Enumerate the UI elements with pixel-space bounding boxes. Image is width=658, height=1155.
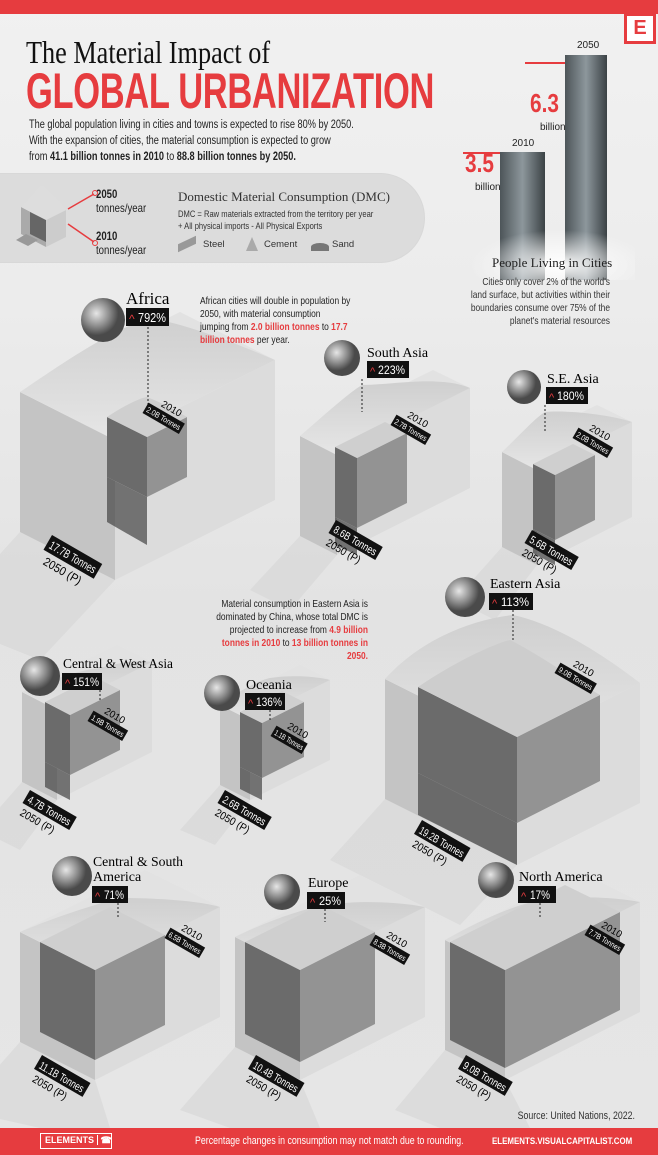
label: Eastern Asia 2050 <box>406 820 470 875</box>
label: North America title and percent <box>518 870 603 903</box>
label: North America 2050: 9.0B Tonnes <box>461 1060 508 1095</box>
icon: North America globe <box>478 862 514 898</box>
footer logo <box>40 1133 112 1149</box>
legend 2050 / 2010 <box>96 187 146 215</box>
label: S.E. Asia title and percent: ^ <box>549 392 555 404</box>
label: North America title and percent: 17% <box>530 888 550 902</box>
region: Central & South America <box>0 855 220 1128</box>
intro paragraph: from 41.1 billion tonnes in 2010 to 88.8 billion tonnes by 2050. <box>29 151 296 163</box>
label: Central & South America 2050: 11.1B Tonnes <box>37 1060 86 1096</box>
DMC heading and definition: Domestic Material Consumption (DMC) <box>178 189 390 204</box>
legend 2050 / 2010: 2050 <box>96 187 117 201</box>
label: Europe title and percent <box>307 876 348 909</box>
label: South Asia 2050: 2050 (P) <box>324 537 363 566</box>
icon: Central & South America globe <box>52 856 92 896</box>
label: South Asia 2050: 8.6B Tonnes <box>331 524 379 559</box>
label: South Asia title and percent: South Asia <box>367 346 429 361</box>
label: Oceania title and percent <box>245 678 293 710</box>
icon: Europe globe <box>264 874 300 910</box>
label: Central & South America title and percent: 71% <box>104 888 124 902</box>
region: North America <box>395 862 640 1128</box>
label: S.E. Asia 2010 <box>572 418 619 458</box>
label: Africa 2050: 17.7B Tonnes <box>47 538 99 576</box>
label: South Asia 2010 <box>390 405 437 445</box>
label: Oceania title and percent: ^ <box>248 698 254 710</box>
label: Central & South America title and percent: Central & South <box>93 855 183 870</box>
icon: legend cube <box>16 207 66 247</box>
label: North America 2010 <box>584 915 631 955</box>
label: Oceania 2050: 2050 (P) <box>213 807 252 836</box>
label: Central & South America 2050 <box>26 1055 90 1110</box>
label: Europe 2050 <box>240 1055 304 1110</box>
label: North America 2010: 7.7B Tonnes <box>587 927 622 953</box>
label: Eastern Asia 2010 <box>554 653 602 694</box>
label: S.E. Asia 2010: 2.0B Tonnes <box>575 430 610 456</box>
label: Africa 2010 <box>142 393 190 434</box>
label: S.E. Asia title and percent: 180% <box>557 389 584 403</box>
chart: skyscrapers people living in cities: billion <box>475 182 501 193</box>
intro paragraph: With the expansion of cities, the material consumption is expected to grow <box>29 135 331 147</box>
label: Europe 2010: 2010 <box>384 930 409 951</box>
label: S.E. Asia 2050 <box>517 530 579 583</box>
label: South Asia title and percent <box>367 346 429 378</box>
chart: skyscrapers people living in cities: 6.3 <box>530 88 559 118</box>
label: South Asia 2010: 2010 <box>405 410 430 431</box>
title: The Material Impact of <box>26 34 270 70</box>
chart: skyscrapers people living in cities: billion <box>540 122 566 133</box>
footer logo: ELEMENTS ☎ <box>45 1135 112 1145</box>
label: Oceania 2050: 2.6B Tonnes <box>220 794 268 829</box>
label: South Asia 2010: 2.7B Tonnes <box>393 417 428 443</box>
source: Source: United Nations, 2022. <box>518 1110 635 1122</box>
label: Europe 2050: 2050 (P) <box>244 1073 283 1103</box>
legend items steel cement sand <box>178 236 354 252</box>
label: Central & South America title and percent: ^ <box>95 891 101 903</box>
label: Oceania 2010: 1.1B Tonnes <box>273 728 305 752</box>
label: Central & South America 2010 <box>164 918 211 958</box>
label: Europe title and percent: ^ <box>310 897 316 909</box>
panel: DMC legend: + All physical imports - All Physical Exports <box>178 221 322 232</box>
label: North America 2010: 2010 <box>599 920 624 941</box>
intro paragraph: The global population living in cities and towns is expected to rise 80% by 2050. <box>29 119 354 131</box>
label: Central & South America 2010: 2010 <box>179 923 204 944</box>
label: Central & South America title and percent <box>92 855 183 903</box>
text: Africa note: African cities will double in population by 2050, with material consumption jumping from 2.0 billion tonnes to 17.7 billion tonnes per year. <box>200 295 350 346</box>
chart: skyscrapers people living in cities <box>463 40 609 280</box>
label: S.E. Asia title and percent <box>546 372 600 404</box>
label: South Asia 2050 <box>321 520 383 573</box>
heading: people living in cities: People Living in Cities <box>492 255 612 270</box>
icon: Eastern Asia globe <box>445 577 485 617</box>
label: Eastern Asia title and percent: Eastern Asia <box>490 577 561 592</box>
label: Africa 2010: 2.0B Tonnes <box>145 405 182 432</box>
label: Central & South America title and percent: America <box>93 870 142 885</box>
panel: DMC legend: 2010 <box>96 229 117 243</box>
label: Oceania title and percent: 136% <box>256 695 282 709</box>
label: Africa 2050: 2050 (P) <box>41 554 84 588</box>
top red bar <box>0 0 658 14</box>
region: South Asia <box>250 340 470 610</box>
label: Europe 2010 <box>370 925 416 965</box>
icon: South Asia globe <box>324 340 360 376</box>
panel: DMC legend: tonnes/year <box>96 243 146 257</box>
label: North America title and percent: North America <box>519 870 603 885</box>
legend items steel cement sand: Steel <box>203 239 225 250</box>
label: Central & West Asia title and percent: ^ <box>65 678 71 690</box>
title <box>26 34 434 119</box>
region: Eastern Asia <box>330 577 640 925</box>
region: Africa <box>0 289 275 660</box>
label: Oceania 2010: 2010 <box>285 721 310 742</box>
label: Central & West Asia 2010 <box>88 701 134 741</box>
label: Oceania 2010 <box>270 716 313 754</box>
label: S.E. Asia title and percent: S.E. Asia <box>547 372 600 387</box>
label: Europe title and percent: 25% <box>319 894 341 908</box>
legend items steel cement sand: Sand <box>332 239 354 250</box>
panel: DMC legend <box>0 173 425 263</box>
label: Europe 2010: 8.3B Tonnes <box>372 937 407 963</box>
label: Africa title and percent: 792% <box>138 310 166 325</box>
label: Central & West Asia 2050: 4.7B Tonnes <box>25 794 73 829</box>
icon: Africa globe <box>81 298 125 342</box>
text: Eastern Asia note: Material consumption in Eastern Asia is dominated by China, whose total DMC is projected to increase from 4.9 billion tonnes in 2010 to 13 billion tonnes in 2050. <box>216 598 368 662</box>
label: Africa 2010: 2010 <box>159 399 184 420</box>
region: S.E. Asia <box>455 370 632 620</box>
panel: DMC legend: DMC = Raw materials extracted from the territory per year <box>178 209 373 220</box>
footer bar <box>0 1128 658 1155</box>
icon: S.E. Asia globe <box>507 370 541 404</box>
label: Central & West Asia title and percent <box>62 657 174 690</box>
region: Oceania <box>180 665 330 845</box>
region: Central & West Asia <box>0 645 174 850</box>
label: Eastern Asia 2010: 9.0B Tonnes <box>557 665 594 692</box>
label: Eastern Asia 2010: 2010 <box>571 659 596 680</box>
label: Central & West Asia 2050: 2050 (P) <box>18 807 57 836</box>
label: Central & West Asia title and percent: Central & West Asia <box>63 657 174 672</box>
label: North America 2050 <box>450 1055 513 1109</box>
label: Central & South America 2010: 6.5B Tonnes <box>167 930 202 956</box>
label: Central & West Asia title and percent: 151% <box>73 675 99 689</box>
label: Oceania title and percent: Oceania <box>246 678 293 693</box>
label: Africa title and percent: Africa <box>126 289 170 308</box>
region: Europe <box>180 874 425 1128</box>
label: Eastern Asia title and percent: ^ <box>492 598 498 610</box>
icon: Central & West Asia globe <box>20 656 60 696</box>
footer note: Percentage changes in consumption may not match due to rounding. <box>195 1135 464 1147</box>
footer url: ELEMENTS.VISUALCAPITALIST.COM <box>492 1136 632 1146</box>
label: Africa title and percent: ^ <box>129 312 135 326</box>
label: Eastern Asia title and percent: 113% <box>501 595 529 609</box>
label: Eastern Asia 2050: 2050 (P) <box>410 838 449 868</box>
chart: skyscrapers people living in cities: 2050 <box>577 40 599 51</box>
icon: Oceania globe <box>204 675 240 711</box>
label: South Asia title and percent: ^ <box>370 366 376 378</box>
label: North America 2050: 2050 (P) <box>454 1073 493 1103</box>
label: Eastern Asia title and percent <box>489 577 561 610</box>
logo E <box>624 13 656 44</box>
label: Africa 2050 <box>36 535 102 593</box>
legend 2050 / 2010: tonnes/year <box>96 201 146 215</box>
label: Central & West Asia 2010: 1.9B Tonnes <box>90 713 125 739</box>
label: Africa title and percent <box>126 289 170 326</box>
text: cities land surface: Cities only cover 2% of the world's land surface, but activities within their boundaries consume over 75% of the planet's material resources <box>471 276 610 327</box>
intro paragraph <box>29 119 354 163</box>
label: South Asia title and percent: 223% <box>378 363 405 377</box>
label: North America title and percent: ^ <box>521 891 527 903</box>
label: Oceania 2050 <box>210 790 272 843</box>
label: Central & West Asia 2050 <box>15 790 77 843</box>
label: Central & South America 2050: 2050 (P) <box>30 1073 69 1103</box>
label: S.E. Asia 2010: 2010 <box>587 423 612 444</box>
label: S.E. Asia 2050: 5.6B Tonnes <box>527 534 575 569</box>
label: Eastern Asia 2050: 19.2B Tonnes <box>417 825 466 861</box>
chart: skyscrapers people living in cities: 2010 <box>512 138 534 149</box>
label: Europe 2050: 10.4B Tonnes <box>251 1060 300 1096</box>
logo E: E <box>633 17 647 39</box>
chart: skyscrapers people living in cities: 3.5 <box>465 148 494 178</box>
title: GLOBAL URBANIZATION <box>26 63 434 119</box>
label: Europe title and percent: Europe <box>308 876 348 891</box>
legend items steel cement sand: Cement <box>264 239 297 250</box>
label: S.E. Asia 2050: 2050 (P) <box>520 547 559 576</box>
label: Central & West Asia 2010: 2010 <box>102 706 127 727</box>
